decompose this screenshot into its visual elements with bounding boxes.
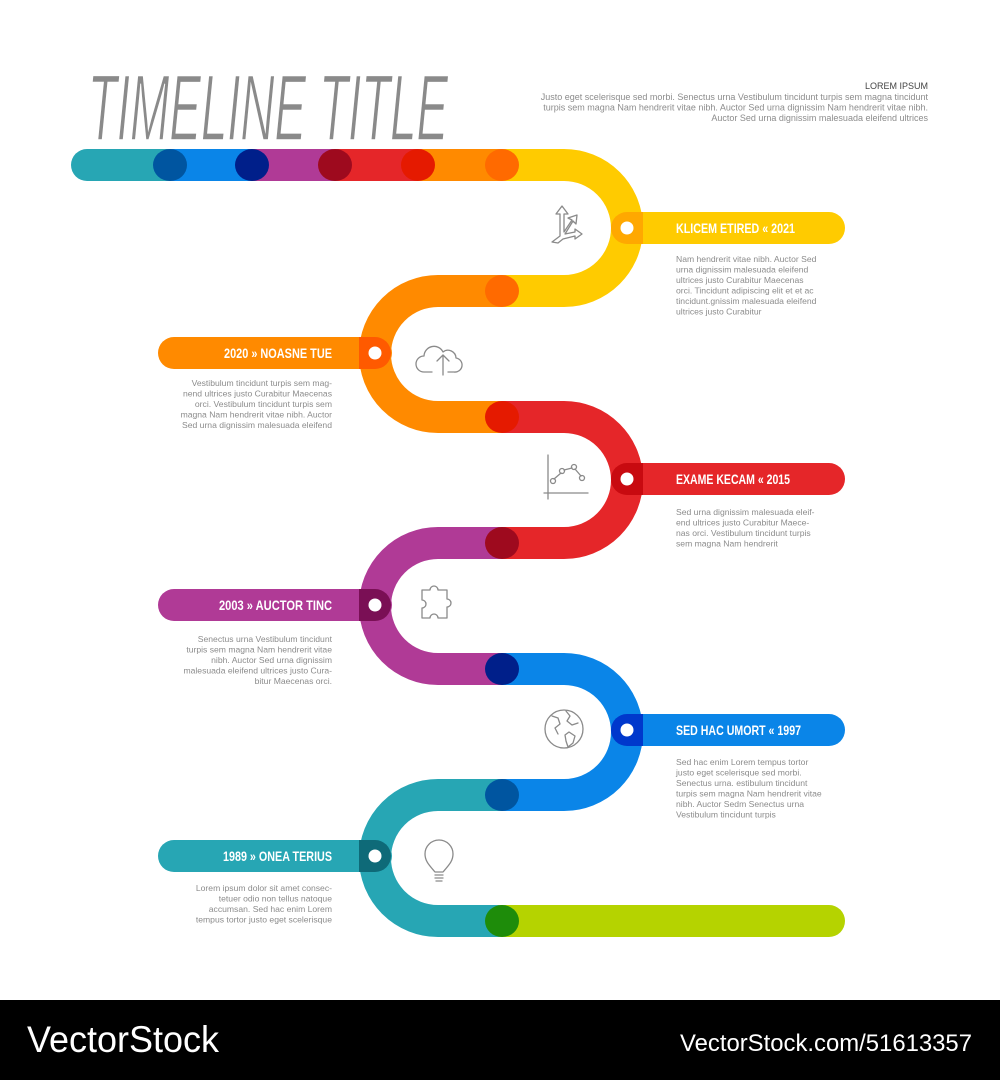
text: 2020: magna Nam hendrerit vitae nibh. Auctor [181, 410, 332, 420]
text: 1997: nibh. Auctor Sedm Senectus urna [676, 799, 804, 809]
text: 2003: Senectus urna Vestibulum tincidunt [198, 634, 333, 644]
text: 2021: tincidunt.gnissim malesuada eleifend [676, 296, 817, 306]
label: 2021 [611, 212, 845, 244]
text: 1997: Vestibulum tincidunt turpis [676, 810, 776, 820]
text: 2015: nas orci. Vestibulum tincidunt turpis [676, 528, 811, 538]
text: 2020 [181, 378, 332, 430]
icon: cloud upload [416, 346, 462, 375]
footer: VectorStock [27, 1019, 219, 1060]
text: 2015: Sed urna dignissim malesuada eleif- [676, 507, 815, 517]
footer: VectorStock.com/51613357 [680, 1030, 972, 1057]
text: 1997: justo eget scelerisque sed morbi. [675, 768, 802, 778]
icon: puzzle [422, 586, 451, 618]
label: 2003 [158, 589, 392, 621]
label: 2020: 2020 » NOASNE TUE [224, 345, 332, 361]
joint dots [153, 149, 519, 937]
icon: chart [544, 455, 588, 499]
text: 1989: Lorem ipsum dolor sit amet consec- [196, 883, 332, 893]
text: 2020: Sed urna dignissim malesuada eleifend [182, 420, 332, 430]
text: 2003: nibh. Auctor Sed urna dignissim [211, 655, 332, 665]
text: 2021: ultrices justo Curabitur Maecenas [676, 275, 804, 285]
text: 2021: orci. Tincidunt adipiscing elit et et ac [676, 286, 814, 296]
text: 2020: Vestibulum tincidunt turpis sem mag- [192, 378, 332, 388]
text: 2003: malesuada eleifend ultrices justo Cura- [183, 666, 332, 676]
text: 2021: Nam hendrerit vitae nibh. Auctor Sed [676, 254, 817, 264]
text: 2015 [676, 507, 815, 548]
label: 1989: 1989 » ONEA TERIUS [223, 848, 332, 864]
text: 1989 [196, 883, 332, 924]
footer [0, 1000, 1000, 1080]
intro text block [541, 81, 928, 123]
text: 2015: end ultrices justo Curabitur Maece- [676, 518, 809, 528]
intro text block: LOREM IPSUM [865, 81, 928, 91]
text: 2021: urna dignissim malesuada eleifend [676, 264, 809, 274]
text: 1997: turpis sem magna Nam hendrerit vitae [676, 788, 822, 798]
text: 1989: tempus tortor justo eget scelerisque [196, 914, 332, 924]
text: 2020: nend ultrices justo Curabitur Maecenas [183, 388, 332, 398]
icon: arrows [552, 206, 582, 243]
label: 2015: EXAME KECAM « 2015 [676, 471, 790, 487]
title: TIMELINE TITLE [88, 55, 449, 160]
text: 1997 [675, 757, 822, 820]
label: 2020 [158, 337, 392, 369]
label: 1989 [158, 840, 392, 872]
label: 2021: KLICEM ETIRED « 2021 [676, 220, 795, 236]
text: 2003 [183, 634, 333, 686]
text: 2021 [676, 254, 817, 316]
text: 2015: sem magna Nam hendrerit [676, 538, 778, 548]
text: 2021: ultrices justo Curabitur [676, 306, 762, 316]
label: 2003: 2003 » AUCTOR TINC [219, 597, 332, 613]
text: 2003: turpis sem magna Nam hendrerit vitae [186, 644, 332, 654]
timeline track [87, 165, 829, 921]
icon: light bulb [425, 840, 453, 881]
intro text block: Justo eget scelerisque sed morbi. Senectus urna Vestibulum tincidunt turpis sem magna tincidunt [541, 92, 928, 102]
text: 2003: bitur Maecenas orci. [255, 676, 332, 686]
label: 1997: SED HAC UMORT « 1997 [676, 722, 801, 738]
label: 1997 [611, 714, 845, 746]
text: 2020: orci. Vestibulum tincidunt turpis sem [195, 399, 332, 409]
text: 1997: Sed hac enim Lorem tempus tortor [676, 757, 808, 767]
intro text block: Auctor Sed urna dignissim malesuada eleifend ultrices [711, 113, 928, 123]
text: 1989: tetuer odio non tellus natoque [219, 894, 332, 904]
icon: globe [545, 710, 583, 748]
intro text block: turpis sem magna Nam hendrerit vitae nibh. Auctor Sed urna dignissim Nam hendrerit vitae nibh. [543, 102, 928, 112]
label: 2015 [611, 463, 845, 495]
text: 1997: Senectus urna. estibulum tincidunt [676, 778, 808, 788]
text: 1989: accumsan. Sed hac enim Lorem [209, 904, 332, 914]
